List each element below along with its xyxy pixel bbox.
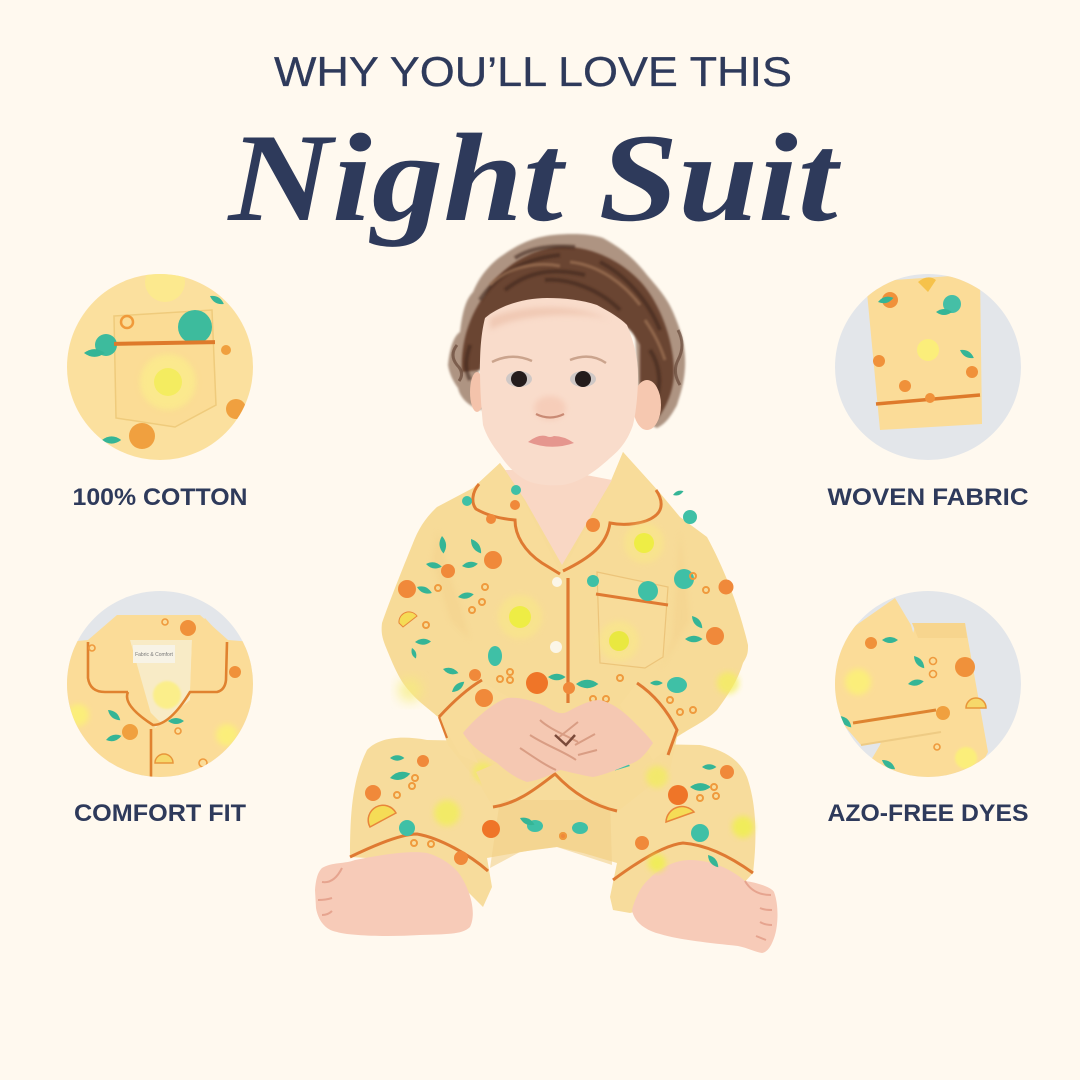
pocket bbox=[597, 572, 668, 668]
face bbox=[480, 298, 638, 485]
label: 100% cotton: 100% COTTON bbox=[72, 484, 248, 511]
nose bbox=[534, 396, 566, 420]
title: why you'll love this: WHY YOU’LL LOVE THIS bbox=[274, 48, 792, 95]
pants piping bbox=[350, 834, 488, 871]
label: woven fabric: WOVEN FABRIC bbox=[828, 484, 1028, 511]
mouth bbox=[528, 436, 574, 447]
shirt body bbox=[382, 452, 748, 812]
right cuff bbox=[620, 683, 677, 760]
print: oranges bbox=[365, 500, 734, 865]
print: teal fruits bbox=[399, 485, 709, 842]
label: azo-free dyes: AZO-FREE DYES bbox=[828, 800, 1028, 827]
shirt shading bbox=[432, 530, 690, 670]
hands bbox=[463, 698, 653, 782]
panel: 100% cotton bbox=[67, 262, 253, 511]
image: collar close-up: Fabric & Comfort bbox=[135, 652, 173, 658]
ears bbox=[470, 372, 661, 430]
pants shadows bbox=[490, 800, 612, 868]
panel: comfort fit bbox=[67, 591, 253, 827]
illustration: seated baby in night suit bbox=[315, 234, 778, 953]
left cuff bbox=[439, 682, 510, 763]
eyes bbox=[492, 357, 606, 387]
image: folded suit close-up bbox=[835, 591, 1021, 777]
label: comfort fit: COMFORT FIT bbox=[74, 800, 246, 827]
print: suns bbox=[398, 523, 754, 872]
right foot bbox=[632, 860, 778, 953]
collar left bbox=[471, 463, 560, 572]
left foot bbox=[315, 852, 473, 936]
pants bbox=[350, 738, 755, 913]
panel: woven fabric bbox=[828, 274, 1028, 511]
buttons bbox=[550, 577, 562, 653]
image: sleeve close-up bbox=[835, 274, 1021, 460]
shirt hem bbox=[476, 763, 640, 812]
hair bbox=[448, 234, 685, 428]
placket bbox=[566, 578, 570, 703]
panel: azo-free dyes bbox=[828, 591, 1028, 827]
face shading bbox=[490, 307, 610, 330]
collar right bbox=[563, 452, 660, 571]
title: night suit: Night Suit bbox=[226, 109, 842, 248]
neck bbox=[505, 470, 612, 565]
image: collar close-up bbox=[67, 591, 253, 777]
print: melons and leaves bbox=[368, 489, 721, 869]
print: small flowers bbox=[394, 573, 719, 847]
image: pocket close-up bbox=[67, 262, 253, 460]
